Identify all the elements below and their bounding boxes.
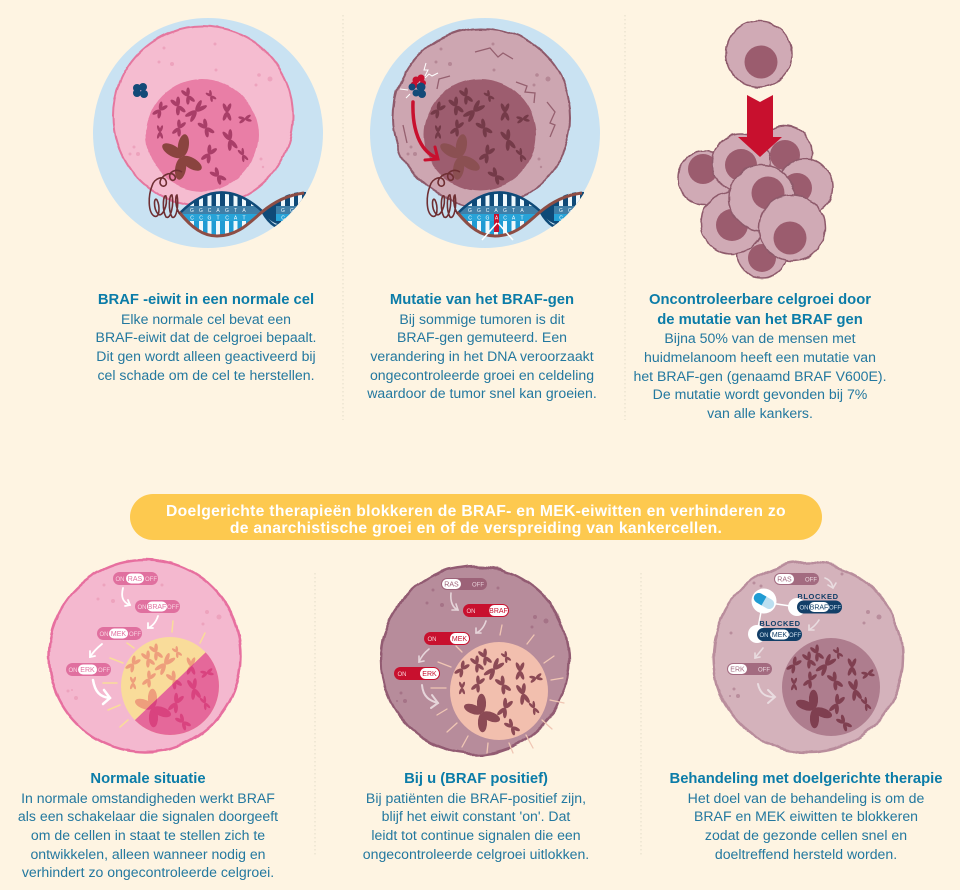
text: targeted therapy: Behandeling met doelgerichte therapie: [670, 771, 942, 787]
text: normal situation: ontwikkelen, alleen wanneer nodig en: [30, 846, 266, 862]
switch BRAF: [463, 604, 509, 617]
text: mutation: Mutatie van het BRAF-gen: [390, 292, 574, 308]
text: normal situation: In normale omstandigheden werkt BRAF: [21, 790, 275, 806]
DNA helix with mutation: A: [494, 208, 498, 214]
DNA helix with mutation: G: [559, 208, 563, 214]
large chromosome: [435, 130, 485, 184]
switch ERK: OFF: [98, 668, 110, 674]
nucleus: [782, 638, 880, 736]
text: BRAF positive: ongecontroleerde celgroei uitlokken.: [363, 846, 589, 862]
banner: Doelgerichte therapieën blokkeren de BRAF- en MEK-eiwitten en verhinderen zo: [166, 503, 786, 520]
red down arrow: [738, 95, 782, 157]
signal arrows: [90, 588, 158, 704]
banner: de anarchistische groei en of de verspreiding van kankercellen.: [230, 520, 722, 537]
red arrow: [413, 102, 438, 160]
illustration: targeted therapy: [713, 562, 903, 752]
nucleus: [450, 642, 548, 740]
nucleus: [146, 79, 258, 191]
switch MEK blocked: MEK: [772, 632, 787, 639]
switch MEK: ON: [100, 632, 108, 638]
text: targeted therapy: Het doel van de behandeling is om de: [688, 790, 924, 806]
DNA helix: T: [234, 208, 237, 214]
DNA helix with mutation: C: [477, 216, 481, 222]
switch MEK: OFF: [129, 632, 141, 638]
text: normal situation: om de cellen in staat te stellen zich te: [31, 827, 265, 843]
text: normal cell: Dit gen wordt alleen geactiveerd bij: [96, 348, 316, 364]
text: normal situation: als een schakelaar die signalen doorgeeft: [18, 808, 278, 824]
banner: [130, 494, 822, 540]
text: uncontrolled growth: Bijna 50% van de mensen met: [664, 330, 856, 346]
mutated cell body: [393, 28, 571, 206]
switch RAS: RAS: [444, 582, 459, 588]
activated protein cluster: [400, 63, 438, 98]
switch MEK: ON: [428, 637, 436, 643]
switch BRAF blocked: BRAF: [810, 604, 828, 612]
text: targeted therapy: zodat de gezonde cellen snel en: [705, 827, 907, 843]
DNA helix: A: [242, 208, 246, 214]
switch MEK blocked: [748, 625, 802, 643]
large chromosome: [157, 130, 207, 184]
switch RAS: ON: [116, 577, 124, 583]
DNA helix: C: [190, 216, 194, 222]
DNA helix: G: [208, 216, 212, 222]
DNA helix with mutation: G: [468, 208, 472, 214]
DNA helix with mutation: G: [568, 208, 572, 214]
DNA helix with mutation: A: [495, 216, 499, 222]
text: normal situation: Normale situatie: [90, 771, 206, 787]
illustration: normal cell: [93, 18, 323, 248]
switch RAS: OFF: [805, 578, 817, 584]
DNA helix: C: [281, 216, 285, 222]
switch ERK: ERK: [730, 666, 745, 674]
DNA helix: G: [225, 208, 229, 214]
cell body: [49, 560, 241, 752]
chromosomes: [453, 647, 544, 737]
switch RAS: [774, 573, 819, 585]
cell cluster: [678, 126, 833, 278]
DNA helix with mutation: G: [503, 208, 507, 214]
switch RAS: [441, 578, 487, 590]
text: normal cell: [96, 292, 316, 383]
text: BRAF positive: leidt tot continue signalen die een: [371, 827, 581, 843]
pill icon: [752, 588, 776, 614]
switch ERK: ERK: [80, 667, 95, 674]
DNA helix: A: [234, 216, 238, 222]
DNA helix with mutation: A: [520, 208, 524, 214]
text: normal cell: BRAF-eiwit dat de celgroei bepaalt.: [96, 329, 316, 345]
DNA helix with mutation: C: [486, 208, 490, 214]
text: uncontrolled growth: huidmelanoom heeft een mutatie van: [644, 349, 876, 365]
text: BRAF positive: Bij patiënten die BRAF-positief zijn,: [366, 790, 586, 806]
illustration: normal situation: [49, 560, 241, 752]
chromosomes: [429, 86, 530, 186]
switch ERK: ON: [68, 668, 78, 674]
faded arrows: [755, 578, 836, 703]
DNA helix with mutation: A: [512, 216, 516, 222]
text: BRAF positive: Bij u (BRAF positief): [404, 771, 548, 787]
text: normal situation: [18, 771, 278, 880]
nucleus: [424, 79, 536, 191]
DNA helix: G: [199, 208, 203, 214]
signal rays: [431, 625, 564, 753]
switch MEK blocked: OFF: [789, 633, 801, 639]
DNA helix with mutation: T: [520, 216, 524, 222]
chromosomes: [785, 643, 876, 733]
switch BRAF blocked: ON: [800, 606, 808, 612]
switch RAS: OFF: [472, 582, 484, 588]
DNA helix with mutation: C: [559, 216, 563, 222]
text: uncontrolled growth: de mutatie van het BRAF gen: [657, 312, 863, 328]
DNA helix: G: [290, 208, 294, 214]
signal rays: [103, 621, 205, 727]
switch RAS: [113, 572, 158, 585]
DNA helix with mutation: G: [477, 208, 481, 214]
chromosomes: [151, 86, 252, 186]
nucleus yellow half: [121, 637, 219, 735]
switch ERK: ON: [398, 672, 406, 678]
text: mutation: [367, 292, 597, 401]
cell body: [713, 562, 903, 752]
switch MEK: [97, 627, 142, 640]
text: mutation: Bij sommige tumoren is dit: [399, 311, 565, 327]
DNA helix: T: [242, 216, 246, 222]
DNA helix with mutation: C: [503, 216, 507, 222]
switch MEK: MEK: [111, 631, 126, 638]
switch BRAF: [135, 600, 180, 613]
text: mutation: waardoor de tumor snel kan groeien.: [367, 385, 597, 401]
switch RAS: OFF: [145, 577, 157, 583]
DNA helix: C: [225, 216, 229, 222]
protein cluster: [133, 83, 148, 98]
text: normal cell: Elke normale cel bevat een: [121, 311, 291, 327]
switch BRAF: BRAF: [148, 604, 166, 611]
text: targeted therapy: BRAF en MEK eiwitten te blokkeren: [694, 808, 918, 824]
DNA helix with mutation: [427, 170, 586, 245]
switch ERK: [66, 663, 111, 676]
text: normal cell: BRAF -eiwit in een normale cel: [98, 292, 314, 308]
illustration: BRAF positive: [381, 566, 569, 754]
DNA helix: [149, 170, 308, 245]
text: targeted therapy: [670, 771, 942, 862]
text: mutation: ongecontroleerde groei en celdeling: [370, 367, 594, 383]
DNA helix: A: [216, 208, 220, 214]
DNA helix with mutation: T: [512, 208, 515, 214]
text: targeted therapy: doeltreffend hersteld worden.: [715, 846, 897, 862]
DNA helix: G: [190, 208, 194, 214]
switch MEK: [424, 632, 470, 645]
normal cell body: [113, 26, 293, 206]
switch RAS: RAS: [128, 576, 143, 583]
DNA helix with mutation: G: [486, 216, 490, 222]
label blocked BRAF: BLOCKED: [797, 592, 839, 601]
text: normal situation: verhindert zo ongecontroleerde celgroei.: [22, 864, 274, 880]
connector lines: [758, 603, 797, 628]
switch RAS: RAS: [777, 576, 792, 584]
label blocked MEK: BLOCKED: [759, 619, 801, 628]
DNA helix: G: [281, 208, 285, 214]
cell body: [381, 566, 569, 754]
switch ERK: [727, 663, 772, 675]
switch ERK: ERK: [422, 671, 437, 678]
switch MEK: MEK: [452, 636, 467, 643]
text: mutation: verandering in het DNA veroorzaakt: [370, 348, 594, 364]
DNA helix: T: [216, 216, 220, 222]
DNA helix: C: [208, 208, 212, 214]
text: uncontrolled growth: Oncontroleerbare celgroei door: [649, 292, 871, 308]
switch BRAF blocked: [788, 598, 842, 616]
text: BRAF positive: [363, 771, 589, 862]
switch ERK: [394, 667, 440, 680]
switch BRAF: OFF: [167, 605, 179, 611]
text: uncontrolled growth: [633, 292, 887, 421]
switch ERK: OFF: [758, 668, 770, 674]
switch MEK blocked: ON: [760, 633, 768, 639]
text: uncontrolled growth: het BRAF-gen (genaamd BRAF V600E).: [633, 368, 887, 384]
switch BRAF blocked: OFF: [829, 606, 841, 612]
DNA helix with mutation: C: [468, 216, 472, 222]
signal arrows: [419, 593, 486, 708]
illustration: mutated cell: [370, 18, 600, 248]
text: uncontrolled growth: De mutatie wordt gevonden bij 7%: [653, 386, 867, 402]
text: normal cell: cel schade om de cel te herstellen.: [97, 367, 315, 383]
switch BRAF: ON: [466, 609, 476, 615]
text: uncontrolled growth: van alle kankers.: [707, 405, 813, 421]
text: mutation: BRAF-gen gemuteerd. Een: [397, 329, 567, 345]
single cell: [726, 21, 792, 87]
illustration: uncontrolled growth: [678, 21, 833, 278]
text: BRAF positive: blijf het eiwit constant 'on'. Dat: [382, 808, 570, 824]
switch BRAF: BRAF: [489, 608, 508, 615]
nucleus pink half: [135, 652, 219, 735]
switch BRAF: ON: [138, 605, 146, 611]
DNA helix: C: [199, 216, 203, 222]
